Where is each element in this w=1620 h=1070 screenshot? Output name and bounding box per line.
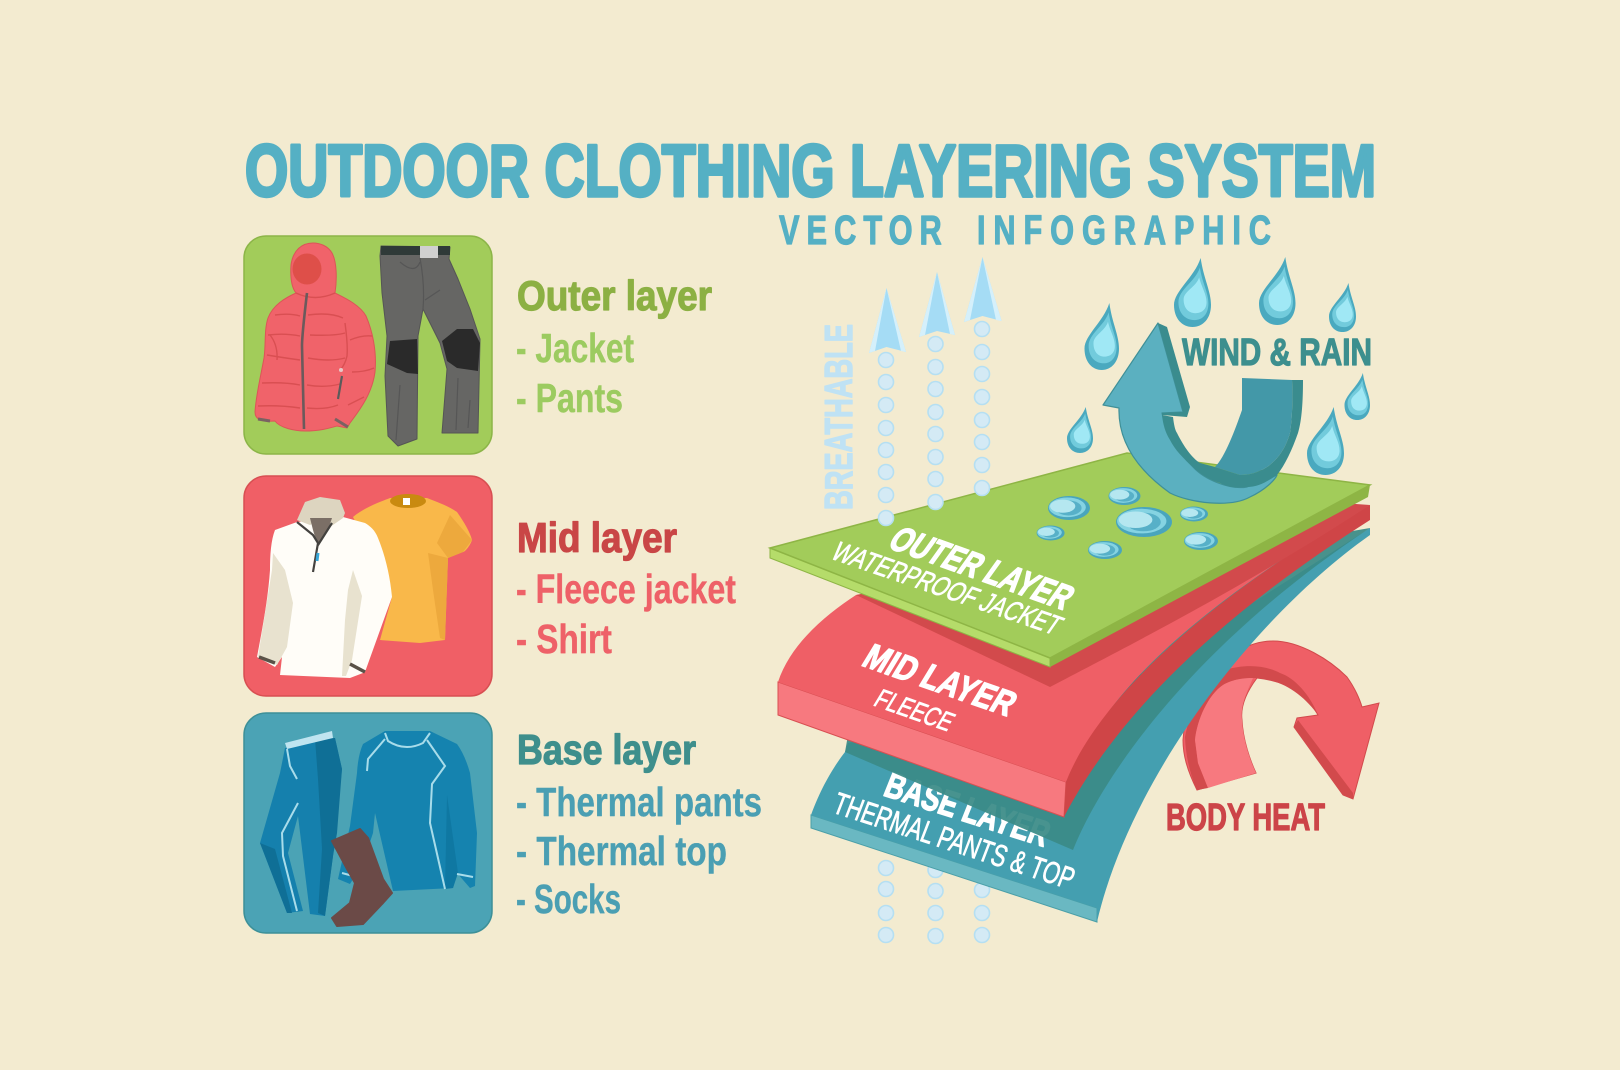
waterproof jacket label: WATERPROOF JACKET: [825, 537, 1069, 641]
arrow: body heat: [1183, 641, 1379, 799]
bubbles rising through the fabric: [878, 322, 990, 526]
icon: brown sock: [332, 829, 392, 926]
icon: grey pants: [380, 246, 480, 446]
text block: base layer: Base layer: [517, 726, 696, 773]
rain drops: [1067, 257, 1370, 475]
panel: mid layer clothing: [244, 476, 492, 696]
text block: base layer: - Socks: [516, 876, 621, 922]
icon: thermal top: [338, 731, 477, 891]
water beads on the outer layer: [1037, 487, 1218, 559]
subtitle: INFOGRAPHIC: [977, 207, 1271, 253]
subtitle: [779, 207, 1271, 253]
thermal pants label: THERMAL PANTS & TOP: [828, 786, 1080, 896]
text block: base layer: [516, 726, 762, 922]
icon: red jacket: [255, 243, 375, 431]
arrows: breathable vapour: [869, 257, 1002, 353]
arrow: wind and rain deflected: [1103, 323, 1303, 503]
wind and rain label: WIND & RAIN: [1182, 332, 1372, 374]
outer layer label: OUTER LAYER: [881, 520, 1083, 617]
text block: outer layer: - Jacket: [516, 325, 634, 371]
panel: base layer clothing: [244, 713, 492, 933]
shadow on base layer: [845, 528, 1370, 850]
icon: thermal pants: [260, 731, 342, 916]
body heat label: BODY HEAT: [1166, 797, 1325, 839]
icon: yellow shirt: [353, 494, 472, 643]
bubbles below the fabric: [878, 860, 990, 944]
text block: mid layer: [516, 514, 736, 662]
text block: mid layer: Mid layer: [517, 514, 677, 561]
breathable label: BREATHABLE: [818, 324, 861, 510]
panel: outer layer clothing: [244, 236, 492, 454]
text block: outer layer: - Pants: [516, 375, 623, 421]
text block: outer layer: [516, 272, 712, 421]
fabric layer: outer: [770, 453, 1370, 667]
text block: base layer: - Thermal pants: [516, 779, 762, 825]
text block: mid layer: - Shirt: [516, 616, 612, 662]
mid layer label: MID LAYER: [856, 636, 1025, 723]
fleece label: FLEECE: [869, 683, 961, 737]
base layer label: BASE LAYER: [879, 764, 1056, 854]
text block: mid layer: - Fleece jacket: [516, 566, 736, 612]
text block: outer layer: Outer layer: [517, 272, 712, 319]
fabric layer: base: [811, 528, 1370, 922]
icon: white fleece jacket: [257, 497, 392, 678]
shadow on mid layer: [856, 500, 1370, 687]
subtitle: VECTOR: [779, 207, 942, 253]
text block: base layer: - Thermal top: [516, 828, 727, 874]
fabric layer: mid: [778, 500, 1370, 817]
